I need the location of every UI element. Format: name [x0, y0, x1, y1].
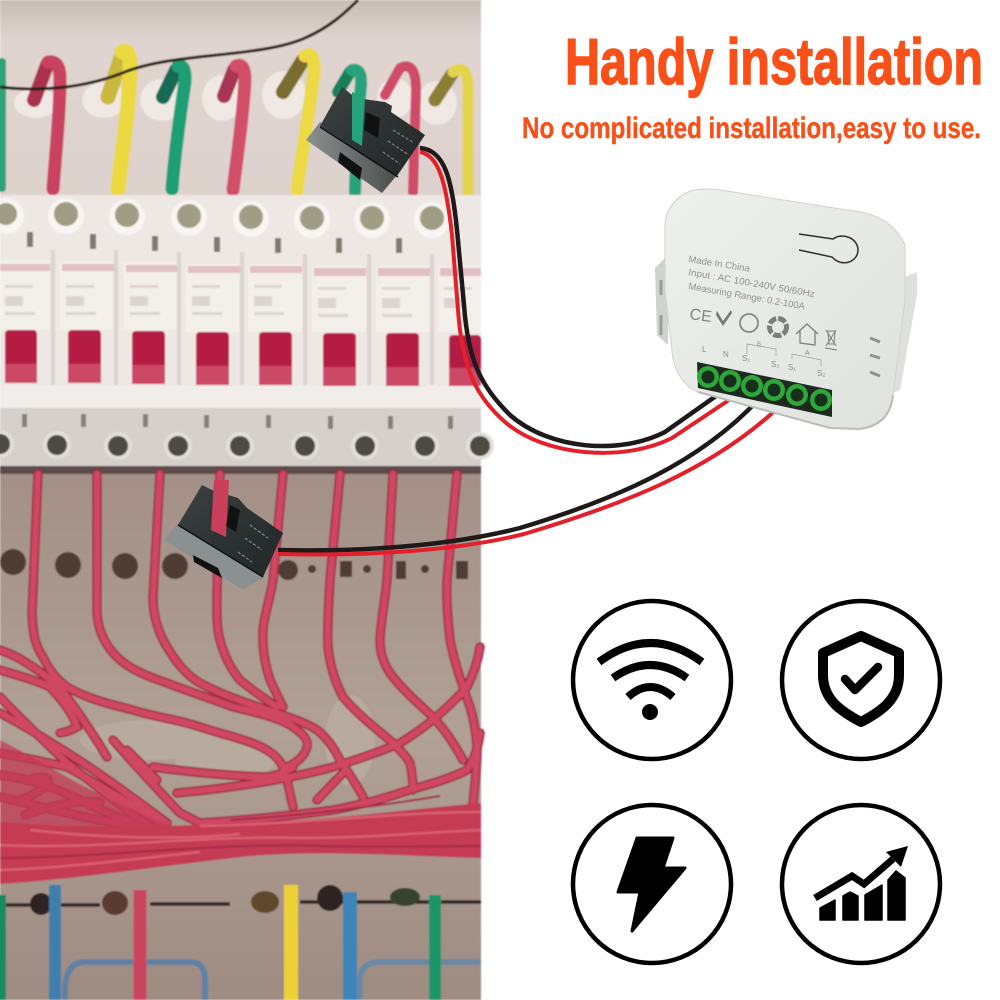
dense red bundle — [0, 803, 481, 884]
module specification text — [688, 253, 816, 312]
cabinet upper wall — [0, 0, 481, 200]
upper breaker screws — [0, 198, 450, 253]
terminal labels: L — [702, 345, 707, 354]
bundle highlights — [0, 812, 481, 870]
lower rail marks — [22, 414, 453, 429]
clamp window with wire — [352, 92, 365, 146]
module specification text: Input : AC 100-240V 50/60Hz — [688, 266, 816, 299]
terminal labels — [702, 342, 825, 378]
right clip — [872, 272, 917, 402]
module specification text: Measuring Range: 0.2-100A — [688, 280, 807, 312]
certification mark: WEEE bin — [825, 330, 837, 350]
module specification text: Made In China — [688, 253, 751, 274]
left clip — [655, 255, 668, 345]
terminal labels: B — [757, 342, 761, 348]
icon: growth chart — [782, 805, 940, 963]
clamp window with wire — [211, 480, 229, 537]
icon: wifi — [573, 601, 731, 759]
lower rail screws — [0, 430, 494, 460]
clamp grey side face — [164, 523, 265, 590]
clamp lever — [364, 112, 380, 138]
certification mark: RoHS check — [716, 310, 732, 326]
current sensor clamp: upper — [306, 87, 425, 193]
certification mark: recycle — [770, 318, 786, 336]
breaker label panels — [0, 260, 481, 332]
cable: upper sensor to module — [420, 148, 732, 453]
terminal labels: S₂ — [771, 360, 779, 369]
bottom coloured wires — [2, 885, 481, 1000]
right clip inner shadow — [880, 290, 905, 392]
white breaker base — [0, 386, 481, 410]
clamp latch — [338, 152, 362, 180]
clamp grey side face — [306, 122, 398, 193]
clamp latch — [193, 555, 222, 578]
rail shadow — [0, 466, 481, 474]
terminal bracket lines — [747, 344, 821, 366]
bottom divider line — [0, 902, 481, 905]
pale wall patches — [80, 695, 375, 785]
terminal labels: S₁ — [742, 354, 750, 363]
panel: electrical cabinet photo — [0, 0, 494, 1000]
right edge notches — [870, 338, 880, 376]
green terminal block — [697, 362, 832, 417]
breaker fine print — [5, 285, 472, 317]
terminal labels: S₁ — [788, 363, 796, 372]
panel: energy meter module — [655, 189, 917, 429]
left clip slots — [660, 280, 662, 335]
bundle shadows — [0, 796, 481, 858]
certification mark: house — [796, 324, 818, 345]
clamp ridge line — [320, 127, 398, 177]
upper terminal collars — [14, 71, 457, 125]
cable: lower sensor to module — [278, 400, 780, 554]
icon: lightning bolt — [573, 805, 731, 963]
current sensor clamp: lower — [164, 480, 283, 590]
dense red wedge at left — [0, 740, 170, 835]
red wire strands: shadow — [0, 474, 480, 827]
breaker pink label strips — [0, 264, 481, 276]
terminal screws — [697, 366, 832, 411]
breaker seams — [53, 250, 432, 385]
breaker bank body — [0, 195, 481, 410]
terminal labels: A — [805, 350, 810, 357]
bottom wall holes — [30, 885, 420, 915]
terminal labels: S₂ — [817, 369, 825, 378]
keyhole button outline — [799, 234, 858, 263]
clamp ridge line — [178, 525, 263, 577]
clamp printed marks — [383, 130, 414, 164]
shell bottom rim shadow — [698, 392, 893, 429]
module shell — [665, 189, 905, 429]
black control wire — [0, 0, 358, 89]
upper coloured wires — [2, 51, 468, 194]
clamp printed marks — [238, 525, 268, 562]
clamp dark top face — [320, 87, 425, 176]
clamp lever — [226, 505, 240, 532]
cabinet lower wall — [0, 468, 481, 1000]
red breaker toggles — [5, 330, 481, 387]
terminal labels: N — [723, 350, 729, 359]
certification mark: CE: CE — [688, 306, 713, 326]
red wire strands: body — [0, 474, 480, 827]
icon: shield with check — [782, 601, 940, 759]
clamp dark top face — [178, 485, 283, 577]
lower wall holes — [0, 549, 468, 580]
lower terminal rail — [0, 408, 481, 470]
certification mark: arrow circle — [740, 314, 758, 332]
